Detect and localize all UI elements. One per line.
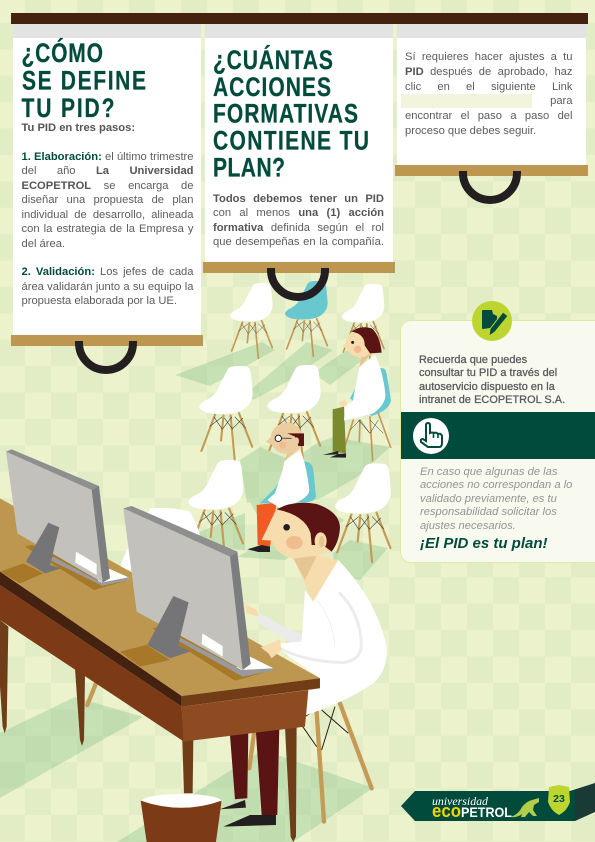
shield with page number: 23 xyxy=(553,793,565,805)
tagline: the PID is your plan: ¡El PID es tu plan! xyxy=(420,535,548,552)
chair: back row teal xyxy=(285,281,328,356)
logo: universidad: universidad xyxy=(432,794,489,808)
waste bin xyxy=(141,794,222,842)
heading: ¿Cómo se define tu PID?: TU PID? xyxy=(22,94,114,124)
text: three steps: del área. xyxy=(22,238,65,250)
text: every employee has a PID: Todos debemos tener un PID xyxy=(213,193,384,205)
desk xyxy=(0,498,320,742)
text: three steps: diseñar una propuesta de plan xyxy=(22,194,194,206)
seated man with glasses on teal chair xyxy=(247,423,316,552)
heading: ¿Cuántas acciones formativas contiene tu plan?: PLAN? xyxy=(213,153,285,183)
heading: ¿Cuántas acciones formativas contiene tu plan?: FORMATIVAS xyxy=(213,99,358,129)
text: three steps: 1. Elaboración: el último trimestre xyxy=(22,151,194,163)
text: three steps: con la estrategia de la Empresa y xyxy=(22,223,194,235)
text: consult your PID xyxy=(419,354,565,406)
link highlight xyxy=(401,94,532,108)
text: every employee has a PID: formativa definida según el rol xyxy=(213,222,384,234)
text: three steps: individual de desarrollo, alineada xyxy=(22,209,194,221)
main man hands xyxy=(245,603,282,658)
text: adjustments note xyxy=(420,466,572,532)
icon: document and pencil xyxy=(472,301,512,341)
top brown rail xyxy=(11,13,588,24)
text: adjustments note: validado previamente, es tu xyxy=(420,493,557,505)
panel 3 white sheet xyxy=(397,38,586,165)
text: adjustments note: En caso que algunas de las xyxy=(420,466,557,478)
panel 1 white sheet xyxy=(13,38,201,335)
panel 1 grey header xyxy=(13,24,201,38)
card background xyxy=(400,320,595,563)
callout: reminder card xyxy=(400,301,595,563)
heading: ¿Cuántas acciones formativas contiene tu plan?: ¿CUÁNTAS xyxy=(213,44,333,76)
main man body, shirt and head xyxy=(257,503,387,715)
text: consult your PID: intranet de ECOPETROL S.A. xyxy=(419,394,565,406)
chair behind monitors xyxy=(87,508,200,705)
seated woman on teal chair xyxy=(323,327,391,461)
text: three steps: Tu PID en tres pasos: xyxy=(22,122,135,134)
panel 2 grey header xyxy=(205,24,393,38)
panel: how the PID is defined xyxy=(11,24,203,374)
panel 3 gold bar xyxy=(395,165,588,176)
chair: front row left xyxy=(188,460,243,557)
text: request adjustments: encontrar el paso a paso del xyxy=(405,110,572,122)
text: request adjustments: Sí requieres hacer ajustes a tu xyxy=(405,51,572,63)
icon: panel 2 hanger xyxy=(267,268,329,301)
text: every employee has a PID: que desempeñas en la compañía. xyxy=(213,236,384,248)
logo: PETROL: PETROL xyxy=(461,805,512,820)
heading: ¿Cuántas acciones formativas contiene tu plan?: CONTIENE TU xyxy=(213,126,369,156)
text: consult your PID: consultar tu PID a través del xyxy=(419,367,557,379)
ribbon xyxy=(401,791,575,821)
ribbon fold xyxy=(570,783,595,821)
monitor, far xyxy=(6,449,128,586)
far desk legs xyxy=(0,620,297,842)
footer: brand ribbon with page number xyxy=(401,783,595,821)
icon: iguana xyxy=(510,798,539,817)
panel 2 white sheet xyxy=(205,38,393,262)
chair: back row left xyxy=(230,283,273,358)
text: three steps: ECOPETROL se encarga de xyxy=(22,180,194,192)
panel: adjustments link xyxy=(395,24,588,204)
floor stripes xyxy=(0,342,390,842)
heading: ¿Cómo se define tu PID?: SE DEFINE xyxy=(22,66,146,96)
chair under main man xyxy=(249,703,372,822)
panel 2 gold bar xyxy=(203,262,395,273)
text: request adjustments: clic en el siguiente Link xyxy=(405,81,572,93)
text: request adjustments: PID después de aprobado, haz xyxy=(405,66,572,78)
text: request adjustments: proceso que debes seguir. xyxy=(405,125,536,137)
main man legs and shoes xyxy=(220,727,279,827)
text: three steps: 2. Validación: Los jefes de cada xyxy=(22,266,194,278)
icon: panel 1 hanger xyxy=(75,341,137,374)
heading: ¿Cuántas acciones formativas contiene tu plan?: ACCIONES xyxy=(213,73,331,103)
logo: eco: eco xyxy=(432,801,461,821)
text: consult your PID: Recuerda que puedes xyxy=(419,354,527,366)
heading: ¿Cómo se define tu PID?: ¿CÓMO xyxy=(22,37,103,69)
text: every employee has a PID: con al menos una (1) acción xyxy=(213,207,384,219)
text: three steps xyxy=(22,122,194,307)
chair: front row right xyxy=(335,463,391,562)
text: three steps: del año La Universidad xyxy=(22,165,194,177)
text: adjustments note: responsabilidad solicitar los xyxy=(420,506,557,518)
monitor, near xyxy=(123,506,273,677)
text: adjustments note: ajustes necesarios. xyxy=(420,520,516,532)
text: request adjustments: para xyxy=(550,95,572,107)
heading: ¿Cómo se define tu PID? xyxy=(22,37,146,124)
text: consult your PID: autoservicio dispuesto en la xyxy=(419,381,555,393)
shield with page number xyxy=(548,785,570,815)
panel: how many training actions xyxy=(203,24,395,301)
text: three steps: área validarán junto a su equipo la xyxy=(22,281,194,293)
chair: middle row left xyxy=(199,366,253,460)
green band xyxy=(401,412,595,459)
panel 1 gold bar xyxy=(11,335,203,346)
icon: panel 3 hanger xyxy=(459,171,521,204)
chair: middle row centre xyxy=(267,365,321,459)
chair: back row right xyxy=(342,284,384,359)
text: every employee has a PID xyxy=(213,193,384,248)
heading: ¿Cuántas acciones formativas contiene tu plan? xyxy=(213,44,369,183)
text: adjustments note: acciones no correspondan a lo xyxy=(420,479,572,491)
icon: pointing hand xyxy=(413,418,449,454)
panel 3 grey header xyxy=(397,24,586,38)
text: three steps: propuesta elaborada por la UE. xyxy=(22,295,177,307)
text: request adjustments xyxy=(405,51,572,137)
